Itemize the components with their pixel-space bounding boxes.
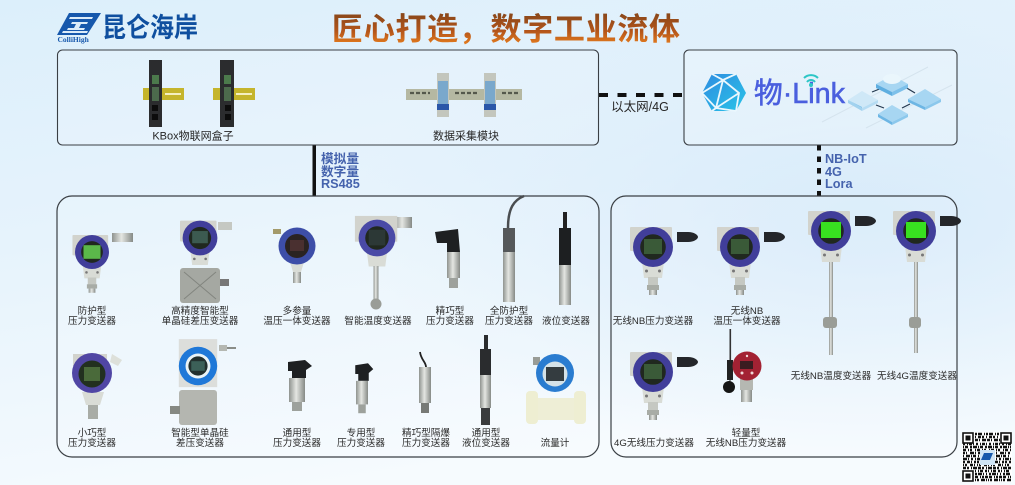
device: 4G无线压力变送器 [614, 352, 698, 449]
wired protocols label [321, 151, 360, 191]
device: 无线NB压力变送器 [613, 227, 698, 327]
device: 无线4G温度变送器 [877, 211, 961, 382]
device: 4G无线压力变送器: 4G无线压力变送器 [614, 437, 694, 449]
logo latin: ColliHigh [58, 35, 90, 44]
panel: wired sensors [57, 196, 599, 457]
panel: wireless sensors [611, 196, 961, 457]
device: 通用型压力变送器: 压力变送器 [273, 437, 321, 449]
device: 流量计 [526, 354, 586, 449]
device: 流量计: 流量计 [541, 437, 570, 449]
title: 匠心打造，数字工业流体 [332, 12, 680, 47]
device: 高精度智能型单晶硅差压变送器: 单晶硅差压变送器 [162, 315, 239, 327]
device: 通用型压力变送器: 通用型 [283, 427, 312, 439]
device: 专用型压力变送器: 压力变送器 [337, 437, 385, 449]
wireless protocols label: NB-IoT [825, 152, 867, 166]
panel: gateways [58, 50, 598, 145]
device: 精巧型压力变送器: 精巧型 [436, 305, 465, 317]
icon: data acquisition modules [406, 73, 522, 117]
device: 精巧型压力变送器: 压力变送器 [426, 315, 474, 327]
device: 小巧型压力变送器: 压力变送器 [68, 437, 116, 449]
label: modules: 数据采集模块 [433, 128, 499, 142]
device: 精巧型隔爆压力变送器: 压力变送器 [402, 437, 450, 449]
device: 全防护型压力变送器: 全防护型 [490, 305, 529, 317]
device: 高精度智能型单晶硅差压变送器: 高精度智能型 [171, 305, 229, 317]
device: 专用型压力变送器 [337, 363, 385, 449]
device: 通用型液位变送器: 液位变送器 [462, 437, 510, 449]
icon: KBox 1 [143, 60, 184, 127]
wired protocols label: 模拟量 [321, 151, 359, 166]
device: 无线NB温压一体变送器: 温压一体变送器 [713, 315, 781, 327]
icon: KBox 2 [213, 60, 255, 127]
device: 全防护型压力变送器: 压力变送器 [485, 315, 533, 327]
device: 小巧型压力变送器 [68, 353, 122, 449]
device: 无线NB温度变送器 [791, 211, 876, 382]
device: 无线NB温压一体变送器: 无线NB [731, 305, 763, 317]
device: 轻量型无线NB压力变送器: 无线NB压力变送器 [706, 437, 787, 449]
device: 精巧型隔爆压力变送器 [402, 352, 450, 449]
label: KBox: KBox物联网盒子 [152, 128, 234, 142]
device: 轻量型无线NB压力变送器: 轻量型 [732, 427, 761, 439]
icon: hexagon logo [702, 74, 746, 111]
device: 专用型压力变送器: 专用型 [347, 427, 376, 439]
device: 无线NB温压一体变送器 [713, 227, 785, 327]
device: 防护型压力变送器: 防护型 [78, 305, 107, 317]
device: 通用型液位变送器: 通用型 [472, 427, 501, 439]
logo wordmark: 昆仑海岸 [102, 13, 198, 43]
device: 液位变送器 [542, 212, 590, 327]
wireless protocols label: Lora [825, 177, 853, 191]
device: 精巧型隔爆压力变送器: 精巧型隔爆 [402, 427, 450, 439]
device: 通用型液位变送器 [462, 335, 510, 449]
ethernet label: 以太网/4G [611, 99, 669, 114]
QR code [962, 432, 1012, 482]
device: 无线NB压力变送器: 无线NB压力变送器 [613, 315, 694, 327]
connector: wireless dashed line [817, 145, 821, 196]
device: 多参量温压一体变送器 [263, 228, 331, 327]
device: 液位变送器: 液位变送器 [542, 315, 590, 327]
logo [57, 13, 198, 44]
device: 全防护型压力变送器 [485, 196, 533, 327]
icon: logo emblem [57, 13, 101, 35]
device: 智能型单晶硅差压变送器 [170, 339, 236, 449]
wireless protocols label: 4G [825, 165, 842, 179]
wired protocols label: RS485 [321, 177, 360, 191]
device: 高精度智能型单晶硅差压变送器 [162, 221, 239, 327]
device: 轻量型无线NB压力变送器 [706, 329, 787, 449]
device: 多参量温压一体变送器: 温压一体变送器 [263, 315, 331, 327]
wireless protocols label [825, 152, 867, 191]
device: 智能温度变送器: 智能温度变送器 [344, 315, 412, 327]
connector: solid line [312, 145, 316, 196]
device: 无线NB温度变送器: 无线NB温度变送器 [791, 370, 872, 382]
device: 智能型单晶硅差压变送器: 智能型单晶硅 [171, 427, 229, 439]
device: 精巧型压力变送器 [426, 229, 474, 327]
wordmark: 物·Link [754, 77, 845, 110]
device: 无线4G温度变送器: 无线4G温度变送器 [877, 370, 957, 382]
connector: ethernet dashed line [599, 93, 684, 97]
device: 多参量温压一体变送器: 多参量 [283, 305, 312, 317]
device: 防护型压力变送器 [68, 233, 133, 327]
panel: cloud platform [684, 50, 957, 145]
device: 通用型压力变送器 [273, 360, 321, 449]
wired protocols label: 数字量 [321, 164, 359, 179]
icon: network platforms [822, 67, 952, 128]
device: 智能温度变送器 [344, 216, 412, 327]
device: 智能型单晶硅差压变送器: 差压变送器 [176, 437, 224, 449]
device: 防护型压力变送器: 压力变送器 [68, 315, 116, 327]
device: 小巧型压力变送器: 小巧型 [78, 427, 107, 439]
icon: wifi [804, 75, 818, 86]
